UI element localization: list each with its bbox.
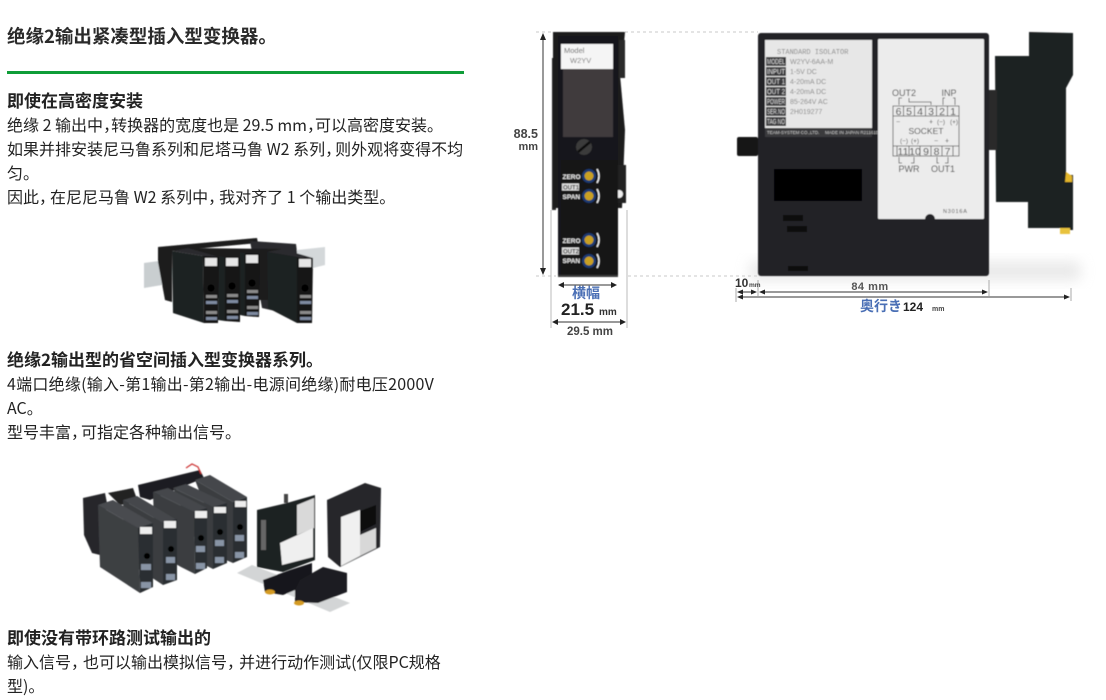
module A (98, 500, 153, 528)
wiring label: OUT1 (931, 164, 955, 174)
adjustment panel: ZERO (562, 174, 581, 181)
spec label: 4-20mA DC (790, 89, 826, 96)
depth labels (735, 276, 944, 314)
wiring label: (+) (950, 119, 958, 126)
text block: high density mounting (7, 87, 463, 208)
text block: space-saving series: 型号丰富，可指定各种输出信号。 (7, 419, 241, 443)
spec label: SER.NO (767, 109, 785, 116)
spec label: POWER (767, 99, 785, 106)
side view dimensions (735, 276, 1071, 314)
wiring label: 4 (917, 106, 923, 118)
height label: mm (518, 141, 538, 153)
front screw (576, 139, 592, 155)
module E (195, 475, 247, 502)
depth labels: 10 (735, 276, 749, 290)
wiring label: (+) (911, 138, 919, 145)
device G (327, 483, 381, 567)
module D (173, 484, 227, 507)
adjustment panel: SPAN (562, 258, 580, 265)
din rail clip (989, 32, 1073, 234)
text block: space-saving series: 4端口绝缘(输入-第1输出-第2输出-电源间绝缘)耐电压2000V (7, 371, 434, 395)
title: 绝缘2输出紧凑型插入型变换器。 (7, 23, 277, 49)
width label: mm (599, 307, 617, 318)
depth labels: 124 (903, 300, 923, 314)
height label (514, 127, 538, 153)
wiring label: PWR (898, 164, 920, 174)
spec label: 2H019277 (790, 109, 822, 116)
spec label: 85-264V AC (790, 99, 828, 106)
depth labels: 84 mm (851, 281, 889, 293)
front view device (552, 32, 626, 277)
spec label: 1-5V DC (790, 69, 817, 76)
display window (774, 169, 862, 201)
module C (153, 488, 207, 512)
module controls (141, 524, 244, 588)
text block: high density mounting: 匀。 (7, 160, 39, 184)
wiring label: 1 (950, 106, 956, 118)
text block: high density mounting: 如果并排安装尼马鲁系列和尼塔马鲁 W2 系列，则外观将变得不均 (7, 136, 463, 160)
green divider (7, 71, 464, 74)
spec label: W2YV-6AA-M (790, 59, 833, 66)
module B (123, 496, 177, 523)
wiring label: (−) (900, 138, 908, 145)
text block: high density mounting: 因此，在尼尼马鲁 W2 系列中，我对齐了 1 个输出类型。 (7, 184, 395, 208)
din rail (237, 565, 350, 612)
wiring label: 3 (928, 106, 934, 118)
wiring label: 5 (906, 106, 912, 118)
wiring label: 11 (898, 146, 909, 158)
device shadow (750, 262, 1080, 280)
text block: space-saving series (7, 346, 434, 443)
text block: loop test output: 型)。 (7, 673, 44, 697)
width label (561, 285, 617, 338)
device F (257, 495, 315, 572)
spec label: STANDARD ISOLATOR (777, 49, 849, 57)
spec label: TEAM-SYSTEM CO.,LTD. (767, 130, 819, 135)
main body (758, 33, 989, 276)
wiring label: INP (941, 88, 957, 98)
width label: 29.5 mm (567, 326, 613, 338)
width label: 横幅 (572, 285, 600, 301)
model label: Model (564, 46, 585, 55)
connector knob (737, 137, 758, 156)
spec label: TAG NO (767, 119, 785, 126)
adjustment panel: SPAN (562, 194, 580, 201)
adjustment panel: OUT2 (563, 250, 580, 256)
spec label: MADE IN JAPAN R21161B (825, 130, 879, 135)
module 1 (172, 248, 219, 323)
wiring label: + (945, 138, 949, 145)
photo: four converters on DIN rail (144, 238, 325, 323)
adjustment panel (558, 160, 618, 277)
module 4 (267, 249, 313, 323)
depth labels: 奥行き (860, 298, 902, 314)
wiring label: (−) (937, 119, 945, 126)
spec label: 4-20mA DC (790, 79, 826, 86)
width label: 21.5 (561, 300, 594, 319)
sockets (263, 563, 312, 595)
depth labels: mm (749, 282, 761, 289)
spec label: MODEL (767, 59, 785, 66)
spec label: INPUT (767, 69, 786, 76)
wiring label: 8 (934, 146, 940, 158)
spec label (765, 40, 879, 137)
dark window (563, 69, 613, 137)
adjustment panel: OUT1 (563, 186, 580, 192)
wiring label: − (896, 119, 900, 126)
wiring label: 7 (945, 146, 951, 158)
side view device (737, 32, 1080, 280)
module 2 (218, 256, 240, 322)
wiring label: OUT2 (892, 88, 916, 98)
heading: loop test output: 即使没有带环路测试输出的 (7, 624, 211, 649)
wiring label: − (934, 138, 938, 145)
wiring label: 2 (939, 106, 945, 118)
text block: high density mounting: 绝缘 2 输出中，转换器的宽度也是 29.5 mm，可以高密度安装。 (7, 112, 443, 136)
text block: loop test output: 输入信号，也可以输出模拟信号，并进行动作测试(仅限PC规格 (7, 649, 441, 673)
back terminals (83, 464, 204, 555)
height label: 88.5 (514, 127, 538, 141)
wiring label: + (929, 119, 933, 126)
wiring label: 6 (896, 106, 902, 118)
dotted guide lines (536, 32, 758, 276)
wiring label: SOCKET (909, 126, 943, 136)
depth labels: mm (932, 306, 944, 313)
device side rails (552, 58, 556, 210)
wiring label: 9 (923, 146, 929, 158)
wiring label: N3016A (943, 209, 968, 215)
front view dimensions (514, 33, 627, 338)
text block: space-saving series: AC。 (7, 395, 43, 419)
wiring label (878, 39, 984, 224)
model label: W2YV (570, 56, 591, 65)
adjustment panel: ZERO (562, 238, 581, 245)
heading: high density mounting: 即使在高密度安装 (7, 87, 143, 112)
model label (561, 44, 613, 69)
wiring label: 10 (909, 146, 921, 158)
spec label: OUT 1 (767, 79, 785, 86)
vents (783, 215, 808, 271)
text block: loop test output (7, 624, 441, 697)
spec label: OUT 2 (767, 89, 785, 96)
photo: converter series lineup (83, 464, 381, 612)
heading: space-saving series: 绝缘2输出型的省空间插入型变换器系列。 (7, 346, 323, 371)
module 3 (240, 252, 260, 317)
